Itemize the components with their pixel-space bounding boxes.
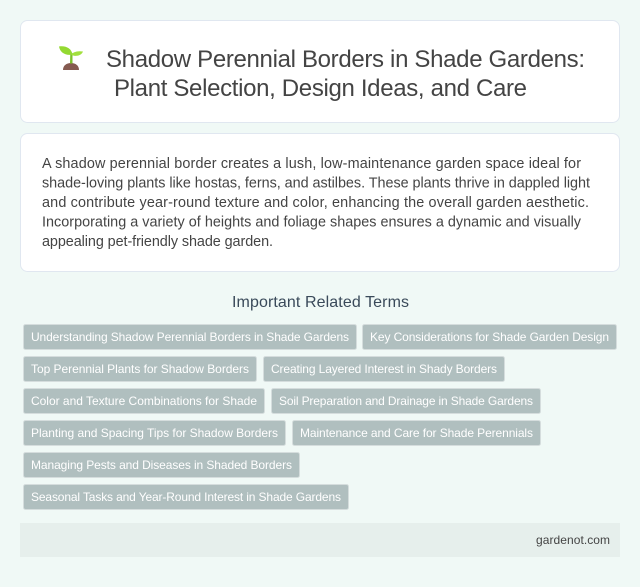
icon: seedling [59, 46, 83, 70]
tag: Planting and Spacing Tips for Shadow Borders [31, 426, 278, 440]
title: Shadow Perennial Borders in Shade Gardens: [106, 46, 585, 73]
text block: description: Incorporating a variety of heights and foliage shapes ensures a dynamic and visually [42, 214, 582, 230]
tag [24, 388, 264, 414]
tag [24, 420, 286, 446]
tag [362, 324, 616, 350]
tag [24, 452, 300, 478]
tag: Maintenance and Care for Shade Perennials [300, 426, 533, 440]
tag group: related terms [24, 324, 616, 510]
tag: Managing Pests and Diseases in Shaded Borders [31, 458, 292, 472]
tag [264, 356, 504, 382]
tag [24, 324, 356, 350]
heading: related terms: Important Related Terms [232, 294, 409, 311]
text block: description [42, 156, 590, 250]
title [106, 46, 585, 102]
panel: title card [20, 20, 620, 122]
tag: Soil Preparation and Drainage in Shade Gardens [279, 394, 533, 408]
tag [24, 356, 256, 382]
text block: description: shade-loving plants like hostas, ferns, and astilbes. These plants thrive in dappled light [42, 176, 590, 192]
text block: description: A shadow perennial border creates a lush, low-maintenance garden space ideal for [42, 156, 581, 172]
tag: Creating Layered Interest in Shady Borders [271, 362, 497, 376]
tag [292, 420, 540, 446]
panel: description [20, 134, 620, 272]
tag: Color and Texture Combinations for Shade [31, 394, 257, 408]
tag: Seasonal Tasks and Year-Round Interest in Shade Gardens [31, 490, 341, 504]
footer [20, 523, 620, 557]
footer: gardenot.com [536, 533, 610, 547]
title: Plant Selection, Design Ideas, and Care [114, 75, 527, 102]
tag [24, 484, 348, 510]
tag: Key Considerations for Shade Garden Design [370, 330, 609, 344]
tag [272, 388, 540, 414]
tag: Top Perennial Plants for Shadow Borders [31, 362, 249, 376]
text block: description: appealing pet-friendly shade garden. [42, 234, 273, 250]
text block: description: and contribute year-round texture and color, enhancing the overall garden aesthetic. [42, 195, 589, 211]
tag: Understanding Shadow Perennial Borders in Shade Gardens [31, 330, 349, 344]
